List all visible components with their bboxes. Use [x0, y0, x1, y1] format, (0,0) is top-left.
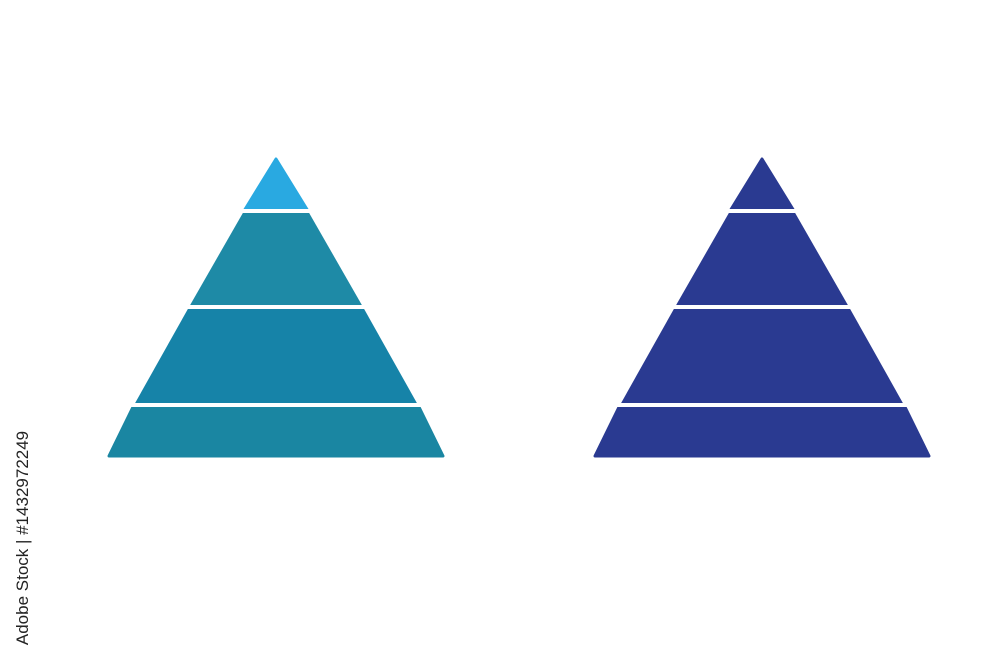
tier 1 top [244, 159, 308, 211]
tier 2 [189, 211, 363, 307]
pyramid: teal four-tier [100, 159, 450, 456]
tier 4 bottom [109, 405, 443, 456]
pyramid: navy four-tier [585, 159, 940, 456]
stock id label: Adobe Stock | #1432972249 [13, 431, 32, 645]
tier 3 [134, 307, 418, 405]
